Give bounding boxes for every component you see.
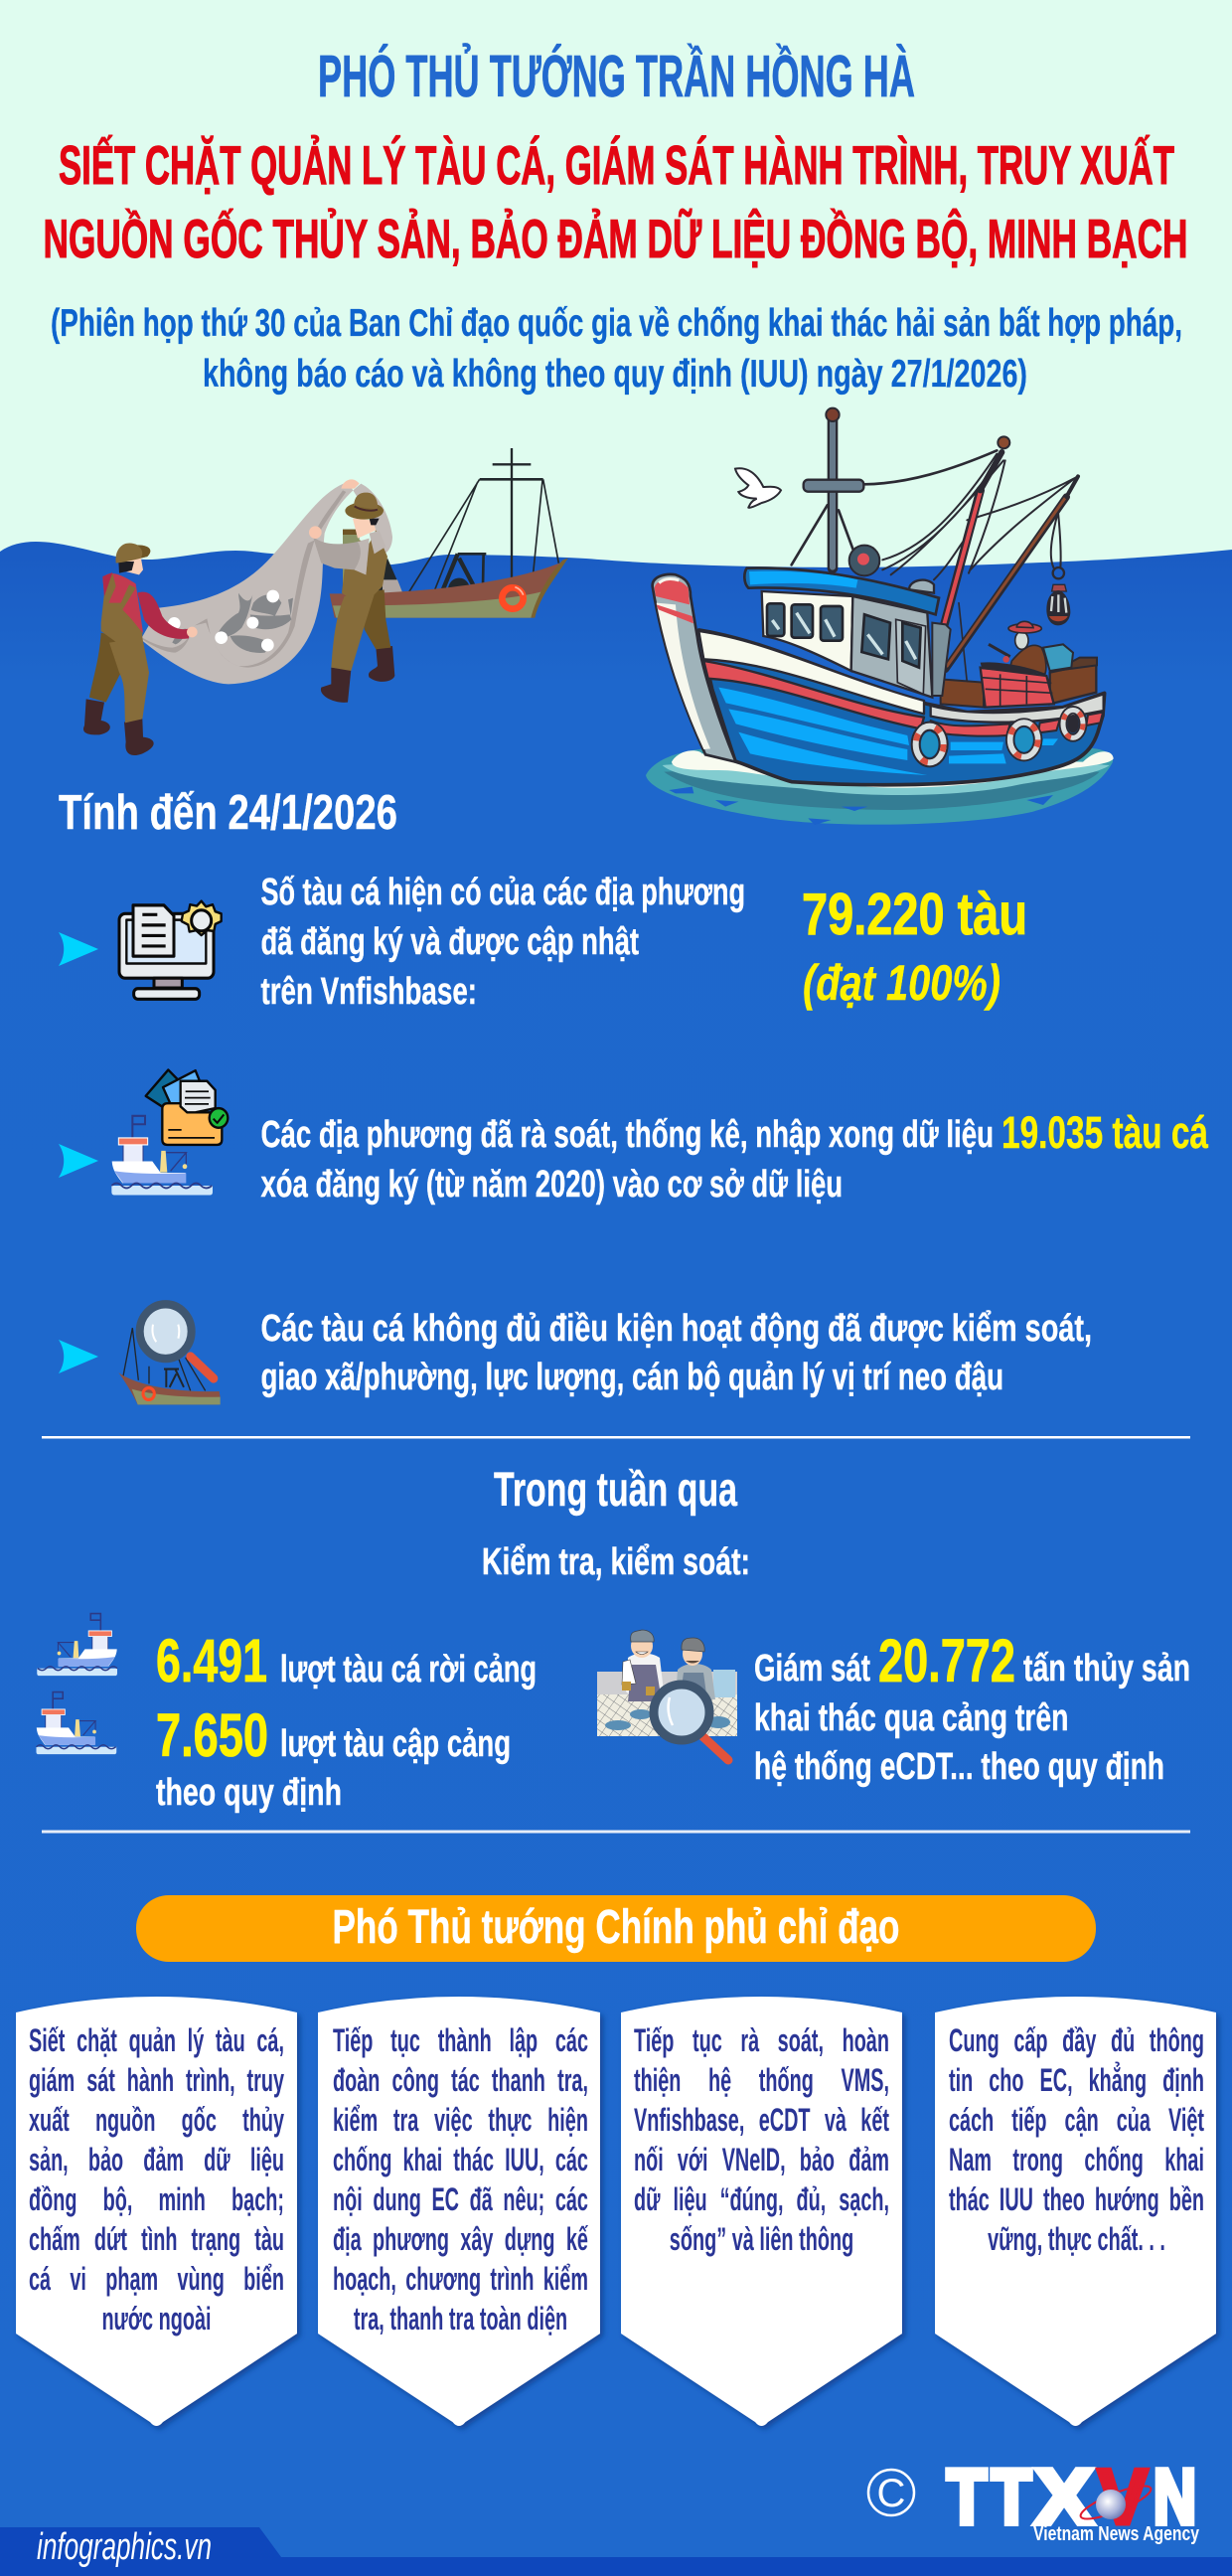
card 4 text: Việt — [1167, 2102, 1203, 2138]
card 4 text: cấp — [1013, 2022, 1047, 2058]
card 1 text: biển — [243, 2261, 284, 2297]
card 2 text: thác — [453, 2142, 494, 2177]
card 3 text: sạch, — [839, 2181, 889, 2217]
card 4 text: đầy — [1062, 2022, 1096, 2058]
text: row 1 description: đã đăng ký và được cập nhật — [260, 921, 639, 963]
card 4 text: hướng — [1094, 2181, 1158, 2217]
card 2 text: dung — [373, 2181, 420, 2217]
logo: TTXVN Vietnam News Agency: T — [947, 2453, 987, 2540]
stat: vessels arriving at port — [156, 1701, 511, 1814]
text: row 1 description — [260, 872, 745, 1013]
card 1 text: liệu — [250, 2142, 284, 2177]
card 4 text — [948, 2022, 1204, 2257]
card 3 text: tục — [693, 2022, 722, 2058]
card 2 text: toàn — [479, 2301, 521, 2336]
card 1 text: nguồn — [95, 2102, 156, 2138]
card 4 text: tiếp — [1011, 2102, 1046, 2138]
card 3 text: đảm — [848, 2142, 889, 2177]
card 1 text: vi — [70, 2261, 86, 2297]
card 2 text: dựng — [504, 2221, 554, 2257]
card 3 text: và — [732, 2221, 754, 2257]
card 1 text: bảo — [88, 2142, 123, 2177]
card 1 text: tình — [141, 2221, 177, 2257]
card 4 text: theo — [1042, 2181, 1084, 2217]
card 2 text: khai — [402, 2142, 442, 2177]
card 1 text: trình, — [186, 2062, 235, 2098]
card 2 text: xây — [460, 2221, 493, 2257]
card 1 text — [29, 2022, 284, 2336]
card 1 text: ngoài — [159, 2301, 212, 2336]
card 1 text: xuất — [29, 2102, 70, 2138]
card 1 text: lý — [188, 2022, 204, 2058]
card 4 text: khẳng — [1088, 2062, 1147, 2098]
card 4 text: EC, — [1039, 2062, 1072, 2098]
illustration: main fishing boat with seagull — [646, 408, 1114, 825]
card 3 text: hoàn — [843, 2022, 889, 2058]
card 2 text: đoàn — [332, 2062, 380, 2098]
card 2 text: hiện — [547, 2102, 587, 2138]
card 1 text: chấm — [29, 2221, 80, 2257]
card 2 text: nội — [332, 2181, 362, 2217]
logo: TTXVN Vietnam News Agency — [947, 2453, 1200, 2545]
card 4 text: chống — [1084, 2142, 1143, 2177]
card 1 text: Siết — [29, 2022, 65, 2058]
card 2 text: lập — [509, 2022, 538, 2058]
illustration: weight hanging from boom — [1046, 567, 1070, 625]
stat: 79.220 vessels: 79.220 tàu — [802, 882, 1027, 947]
card 4 text: thác — [948, 2181, 989, 2217]
card 2 text: thành — [437, 2022, 491, 2058]
card 2 text: tra, — [557, 2062, 587, 2098]
stat: monitored seafood tonnage: khai thác qua cảng trên — [754, 1697, 1069, 1739]
logo: TTXVN Vietnam News Agency: X — [1035, 2453, 1093, 2540]
card 2 text: tra, — [353, 2301, 384, 2336]
card 1 text: phạm — [105, 2261, 158, 2297]
illustration: inspectors with magnifier over fishing net — [597, 1630, 737, 1760]
text: row 3 description — [260, 1308, 1092, 1398]
card 1 text: bộ, — [103, 2181, 132, 2217]
icon: boat departing port — [37, 1614, 117, 1676]
card 4 text: định — [1162, 2062, 1203, 2098]
card 2 text: các — [554, 2181, 587, 2217]
illustration: seagull — [735, 468, 781, 508]
card 3 text: VNeID, — [722, 2142, 786, 2177]
card 3 text: sống” — [670, 2221, 726, 2257]
illustration: hull — [698, 630, 1105, 785]
text: row 2 description — [260, 1107, 1209, 1206]
footer tab — [0, 2527, 281, 2576]
stat: monitored seafood tonnage — [754, 1627, 1190, 1788]
section heading: this past week: Trong tuần qua — [494, 1464, 737, 1517]
card 2 text: thanh — [491, 2062, 544, 2098]
card 2 text: chống — [332, 2142, 391, 2177]
card 3 text — [634, 2022, 889, 2257]
card 4 text: . . . — [1138, 2221, 1164, 2257]
arrow — [59, 1144, 98, 1178]
card 2 text: EC — [431, 2181, 459, 2217]
card 1 text: hành — [127, 2062, 174, 2098]
card 3 text: thông — [799, 2221, 853, 2257]
card 2 text: tục — [390, 2022, 419, 2058]
background: blue sea with wave — [0, 542, 1232, 2576]
card 3 text: rà — [740, 2022, 759, 2058]
card 3 text: và — [825, 2102, 847, 2138]
text: row 1 description: Số tàu cá hiện có của các địa phương — [260, 872, 745, 913]
card 3 text: dữ — [634, 2181, 660, 2217]
card 1 text: cá — [29, 2261, 51, 2297]
text: row 1 description: trên Vnfishbase: — [260, 971, 477, 1013]
card 3 text: liệu — [673, 2181, 707, 2217]
banner: Deputy PM directives — [136, 1895, 1096, 1962]
card 3 text: Vnfishbase, — [634, 2102, 744, 2138]
card 2 text: thanh — [389, 2301, 443, 2336]
card 4 text: bền — [1168, 2181, 1203, 2217]
illustration: left fisherman — [83, 543, 198, 755]
section heading: as of date: Tính đến 24/1/2026 — [59, 786, 397, 840]
card 4 text: Cung — [948, 2022, 999, 2058]
card 3 text: liên — [759, 2221, 794, 2257]
card 2 text: địa — [332, 2221, 361, 2257]
card 2 text: công — [391, 2062, 438, 2098]
illustration: bow post — [653, 574, 736, 762]
card 4 text: thực — [1047, 2221, 1091, 2257]
card 3 text: VMS, — [841, 2062, 889, 2098]
icon: magnifier over boat — [118, 1304, 221, 1404]
illustration: fishermen hauling net with boat behind — [83, 448, 568, 755]
card 4 text: thông — [1149, 2022, 1203, 2058]
card 4 text: Nam — [948, 2142, 992, 2177]
icon: monitor with document and gear — [119, 901, 222, 999]
card 2 text: đã — [469, 2181, 492, 2217]
arrow — [59, 1340, 98, 1373]
card 1 text: cá, — [256, 2022, 284, 2058]
illustration: rigging and masts — [792, 420, 1078, 683]
card 2 text: tác — [451, 2062, 479, 2098]
card 1 text: minh — [159, 2181, 206, 2217]
card 2 text: các — [554, 2022, 587, 2058]
footer: website: infographics.vn — [37, 2526, 212, 2568]
row 1: registered fishing vessels — [59, 901, 222, 999]
icon: boat arriving at port — [36, 1692, 116, 1754]
card 4 text: cận — [1064, 2102, 1098, 2138]
card 3 text: đủ, — [797, 2181, 826, 2217]
card 3 text: thống — [759, 2062, 814, 2098]
copyright mark: C — [877, 2472, 905, 2515]
logo: TTXVN Vietnam News Agency: N — [1154, 2453, 1196, 2540]
card 2 text: tra — [448, 2301, 474, 2336]
stat: vessels leaving port — [156, 1627, 537, 1694]
card 1 text: quản — [129, 2022, 176, 2058]
card 3 text: Tiếp — [634, 2022, 674, 2058]
card 3 text: kết — [860, 2102, 889, 2138]
card 4 text: cách — [948, 2102, 994, 2138]
card 1 text: đồng — [29, 2181, 77, 2217]
card 1 text: trạng — [192, 2221, 240, 2257]
card 1 text: đảm — [143, 2142, 184, 2177]
card 4 text: khai — [1164, 2142, 1203, 2177]
card 3 text: nối — [634, 2142, 664, 2177]
logo: TTXVN Vietnam News Agency: T — [992, 2453, 1031, 2540]
stat: 79.220 vessels — [802, 882, 1027, 1011]
copyright mark — [868, 2470, 914, 2515]
card 1 text: tàu — [254, 2221, 284, 2257]
card 2 text: việc — [434, 2102, 472, 2138]
illustration: background fishing boat — [330, 448, 568, 618]
card 2 text: thực — [488, 2102, 532, 2138]
card 3 text: hệ — [708, 2062, 731, 2098]
card 1 text: dữ — [204, 2142, 231, 2177]
card 2 text — [332, 2022, 588, 2336]
card 3 text: eCDT — [759, 2102, 811, 2138]
stat: vessels arriving at port: 7.650 — [156, 1701, 268, 1769]
illustration: wheelhouse — [744, 567, 951, 698]
card 2 text: kiểm — [332, 2102, 378, 2138]
card 1 text: sản, — [29, 2142, 69, 2177]
card 3 text: soát, — [778, 2022, 824, 2058]
card 4 text: của — [1116, 2102, 1150, 2138]
card 2 text: các — [554, 2142, 587, 2177]
stat: 79.220 vessels: (đạt 100%) — [803, 955, 1001, 1011]
stat: vessels arriving at port: lượt tàu cập cảng — [280, 1723, 511, 1765]
heading: main red headline — [44, 134, 1188, 269]
card 1 text: bạch; — [231, 2181, 284, 2217]
row 2: deregistered vessels data — [59, 1070, 228, 1195]
illustration: right fisherman — [309, 479, 394, 703]
banner: Deputy PM directives: Phó Thủ tướng Chính phủ chỉ đạo — [332, 1901, 900, 1954]
arrow — [59, 932, 98, 966]
card 4 text: vững, — [988, 2221, 1042, 2257]
card 2 text: Tiếp — [332, 2022, 373, 2058]
card 1 text: sát — [86, 2062, 115, 2098]
row 3: vessels not eligible to operate — [59, 1304, 221, 1404]
illustration: cargo and fisherman on stern — [941, 621, 1097, 708]
card 1 text: thủy — [242, 2102, 284, 2138]
text: row 2 description: xóa đăng ký (từ năm 2020) vào cơ sở dữ liệu — [260, 1164, 843, 1206]
card 2 text: hoạch, — [332, 2261, 395, 2297]
card 2 text: kế — [565, 2221, 587, 2257]
card 2 text: chương — [405, 2261, 481, 2297]
card 3 text: “đúng, — [720, 2181, 784, 2217]
subtitle: meeting context — [51, 302, 1182, 396]
stat: monitored seafood tonnage: 20.772 — [878, 1627, 1015, 1694]
card 4 text: đủ — [1111, 2022, 1135, 2058]
stat: monitored seafood tonnage: Giám sát — [754, 1648, 870, 1690]
card 4 text: IUU — [999, 2181, 1032, 2217]
card 4 text: chất — [1097, 2221, 1138, 2257]
card 2 text: kiểm — [542, 2261, 587, 2297]
card 4 text: tin — [948, 2062, 973, 2098]
card 1 text: tàu — [216, 2022, 245, 2058]
card 1 text: nước — [101, 2301, 153, 2336]
card 1 text: chặt — [77, 2022, 117, 2058]
card 2 text: diện — [527, 2301, 567, 2336]
illustration: water and foam — [646, 747, 1114, 825]
card 1 text: gốc — [182, 2102, 217, 2138]
logo: TTXVN Vietnam News Agency: V — [1098, 2453, 1148, 2540]
card 1 text: truy — [247, 2062, 284, 2098]
stat: vessels leaving port: lượt tàu cá rời cảng — [280, 1649, 537, 1690]
card 2 text: nêu; — [503, 2181, 544, 2217]
footer band — [0, 2557, 1232, 2576]
card 2 text: phương — [373, 2221, 448, 2257]
card 1 text: giám — [29, 2062, 75, 2098]
stat: vessels arriving at port: theo quy định — [156, 1772, 342, 1814]
illustration: life rings — [916, 710, 1083, 762]
subheading: inspection and control: Kiểm tra, kiểm soát: — [482, 1541, 750, 1583]
illustration: net with fish — [141, 482, 392, 684]
card 2 text: tra — [392, 2102, 418, 2138]
card 3 text: bảo — [800, 2142, 835, 2177]
card 1 text: dứt — [94, 2221, 127, 2257]
card 1 text: vùng — [177, 2261, 225, 2297]
card 4 text: cho — [989, 2062, 1023, 2098]
card 2 text: trình — [490, 2261, 534, 2297]
card 2 text: IUU, — [505, 2142, 543, 2177]
card backgrounds: four directive panels — [16, 1997, 1216, 2426]
card 3 text: với — [678, 2142, 708, 2177]
card 3 text: thiện — [634, 2062, 681, 2098]
stat: vessels leaving port: 6.491 — [156, 1627, 267, 1694]
card 4 text: trong — [1012, 2142, 1063, 2177]
icon: boat with document folder — [111, 1070, 228, 1195]
